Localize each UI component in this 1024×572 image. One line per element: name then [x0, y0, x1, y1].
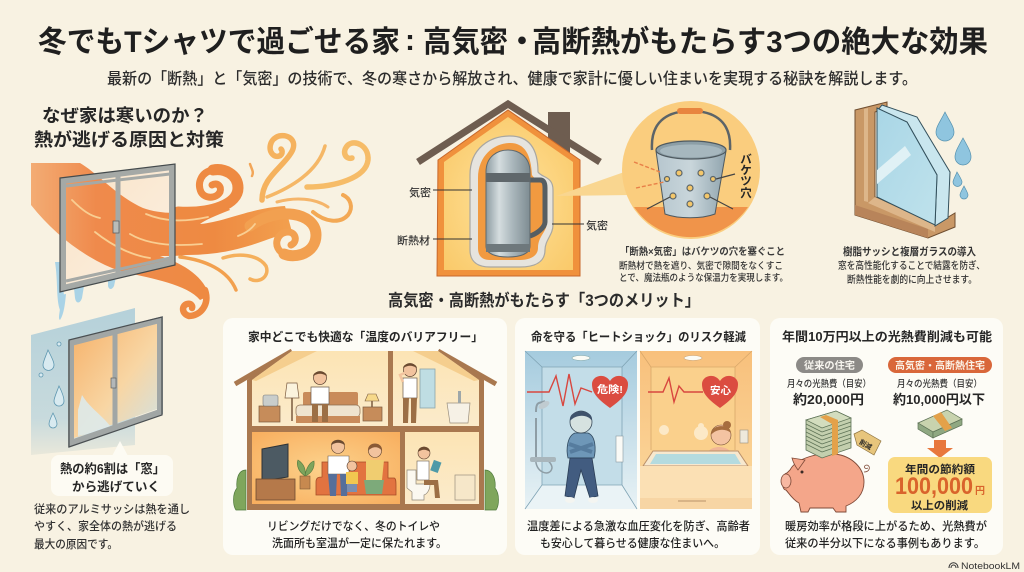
frost [78, 395, 112, 436]
title: 冬でもTシャツで過ごせる家 [38, 25, 400, 59]
shower door [420, 369, 435, 408]
window frame [63, 167, 172, 288]
title: 高断熱がもたらす3つの絶大な効果 [532, 25, 988, 59]
cold bathroom [525, 351, 637, 509]
hot air band [31, 163, 292, 300]
shivering man [565, 411, 598, 503]
text: window explanation [838, 245, 985, 286]
pill: high performance: 高気密・高断熱住宅 [895, 359, 985, 372]
arrow down [927, 440, 953, 458]
panel heading: 家中どこでも快適な「温度のバリアフリー」 [248, 329, 483, 344]
section heading: why the house is cold: なぜ家は寒いのか？ [42, 106, 208, 126]
bushes [234, 470, 498, 510]
tag [854, 430, 881, 455]
swirl 7 [223, 255, 267, 281]
thermos handle [530, 180, 545, 236]
illustration: insulated house with thermos [397, 104, 609, 276]
panel caption: も安心して暮らせる健康な住まいへ。 [540, 536, 725, 550]
label: bucket hole: ツ [740, 176, 752, 188]
ECG [648, 378, 703, 402]
window glass [74, 323, 160, 438]
callout: 60% of heat: 熱の約6割は「窓」 [60, 461, 165, 476]
label: bucket hole: 穴 [740, 186, 752, 200]
piggy bank [781, 454, 869, 512]
swirl 1 [178, 170, 238, 212]
plant [297, 460, 314, 489]
zoom beam [556, 170, 632, 196]
bed [296, 392, 360, 423]
thermos [486, 150, 530, 257]
heart: safe: 安心 [710, 384, 731, 397]
panel caption [527, 519, 750, 550]
title [38, 24, 988, 59]
text: window explanation: 断熱性能を劇的に向上させます。 [847, 273, 977, 286]
panel caption: 温度差による急激な血圧変化を防ぎ、高齢者 [527, 519, 750, 533]
panel heading: 命を守る「ヒートショック」のリスク軽減 [531, 329, 746, 344]
icicles [55, 262, 116, 320]
title: : [405, 24, 415, 57]
house illustration [234, 351, 498, 510]
pill: conventional: 従来の住宅 [804, 359, 855, 372]
illustration: heat escaping through window [31, 136, 368, 320]
warm inner zone [478, 143, 547, 260]
text: bucket explanation: 断熱材で熱を遮り、気密で隙間をなくすこ [619, 260, 783, 272]
room: bedroom [252, 351, 388, 426]
swirl 6 [183, 290, 206, 316]
leak lines [647, 174, 735, 209]
heart: danger: 危険! [597, 383, 623, 396]
warm bathroom [640, 351, 752, 509]
bucket body [656, 151, 726, 218]
text: aluminium sash: やすく、家全体の熱が逃げる [34, 519, 177, 533]
label: insulation: 断熱材 [397, 234, 431, 247]
front glass pane [877, 108, 937, 225]
family [328, 440, 384, 496]
text: aluminium sash: 従来のアルミサッシは熱を通し [34, 502, 190, 516]
sink [447, 403, 470, 423]
rear glass pane [878, 105, 950, 226]
logo: NotebookLM: NotebookLM [961, 561, 1020, 572]
panel caption: 洗面所も室温が一定に保たれます。 [272, 536, 447, 550]
bucket handle [652, 111, 730, 150]
title: 高気密 [423, 26, 508, 59]
toilet and reader [407, 447, 475, 500]
text: bucket explanation: とで、魔法瓶のような保温力を実現します。 [619, 272, 788, 284]
room: living [252, 432, 400, 504]
cost: conventional: 月々の光熱費（目安） [787, 378, 871, 390]
red ECG [527, 374, 592, 406]
towel [616, 436, 623, 462]
bathtub [643, 451, 748, 466]
panel caption: 暖房効率が格段に上がるため、光熱費が [785, 519, 987, 533]
swirl 4 [307, 143, 368, 187]
panel: energy cost savings [770, 318, 1003, 555]
cost: high performance: 約10,000円以下 [893, 392, 985, 407]
pill: high performance [888, 357, 992, 373]
swirl 2 [250, 199, 328, 256]
panel heading: 年間10万円以上の光熱費削減も可能 [782, 329, 993, 344]
cost: high performance: 月々の光熱費（目安） [897, 378, 982, 390]
person brushing teeth [400, 364, 417, 423]
warm interior [444, 117, 573, 270]
illustration: cold window [31, 308, 162, 455]
room: toilet [405, 432, 479, 504]
text: window explanation: 樹脂サッシと複層ガラスの導入 [843, 245, 976, 258]
wood frame [855, 102, 955, 238]
callout: 60% of heat: から逃げていく [72, 479, 160, 494]
heading: 3 merits: 高気密・高断熱がもたらす「3つのメリット」 [388, 290, 700, 310]
swirl 5 [313, 195, 351, 221]
panel caption [267, 519, 447, 550]
small money stack [918, 410, 962, 438]
label: airtight left: 気密 [409, 186, 432, 199]
circle [622, 101, 760, 239]
fleck [250, 164, 253, 176]
panel caption: 従来の半分以下になる事例もあります。 [785, 536, 985, 550]
text: aluminium sash: 最大の原因です。 [34, 537, 118, 551]
drops [39, 342, 64, 428]
illustration: double-glazed resin window [855, 102, 971, 238]
shower [536, 401, 545, 460]
swirl 3 [262, 136, 294, 200]
water drops [936, 112, 971, 199]
title: ・ [507, 26, 537, 59]
savings box: 年間の節約額 [905, 462, 975, 476]
cost: conventional [787, 378, 871, 407]
bucket holes [664, 170, 716, 207]
roof [418, 104, 600, 162]
cost: high performance [893, 378, 985, 407]
tag: 削減 [858, 437, 874, 452]
walls [247, 351, 484, 510]
cost: conventional: 約20,000円 [793, 392, 864, 407]
callout: 60% of heat [51, 441, 173, 496]
label: airtight right: 気密 [586, 219, 609, 232]
savings box: 100,000 [895, 473, 973, 500]
tv [256, 444, 295, 500]
text: window explanation: 窓を高性能化することで結露を防ぎ、 [838, 259, 985, 272]
light streaks [72, 200, 255, 258]
label: bucket hole: バ [740, 153, 752, 166]
subtitle: 最新の「断熱」と「気密」の技術で、冬の寒さから解放され、健康で家計に優しい住まいを実現する秘訣を解説します。 [107, 70, 917, 88]
savings box: 円 [975, 485, 985, 497]
money stack [806, 411, 851, 458]
chimney [548, 112, 570, 154]
text: bucket explanation [619, 245, 788, 284]
heart: safe [702, 376, 738, 408]
panel caption [785, 519, 987, 550]
roof [235, 351, 292, 384]
text: aluminium sash [34, 502, 190, 551]
label: bucket hole [740, 153, 752, 200]
house wall [437, 110, 580, 276]
illustration: leaky bucket analogy [556, 101, 760, 239]
savings box [888, 457, 992, 513]
label: bucket hole: ケ [740, 164, 752, 177]
window glass [60, 164, 175, 292]
cold wall [31, 308, 135, 455]
heart: danger [592, 376, 628, 408]
sofa [316, 462, 396, 495]
bedroom furniture [259, 383, 382, 422]
panel: temperature barrier free [223, 318, 507, 555]
panel: heat shock [515, 318, 760, 555]
person on bed [311, 372, 329, 422]
room: washroom [393, 351, 479, 426]
insulation layer [470, 136, 553, 267]
panel caption: リビングだけでなく、冬のトイレや [267, 519, 440, 533]
section heading: why the house is cold [34, 106, 224, 150]
steam [659, 423, 708, 440]
controller [740, 430, 748, 443]
strand [267, 146, 325, 197]
frame [71, 320, 160, 443]
soaking woman [706, 421, 733, 456]
pill: conventional [796, 357, 863, 373]
section heading: why the house is cold: 熱が逃げる原因と対策 [34, 129, 224, 150]
text: bucket explanation: 「断熱×気密」はバケツの穴を塞ぐこと [620, 245, 785, 258]
savings box: 以上の削減 [911, 498, 968, 512]
